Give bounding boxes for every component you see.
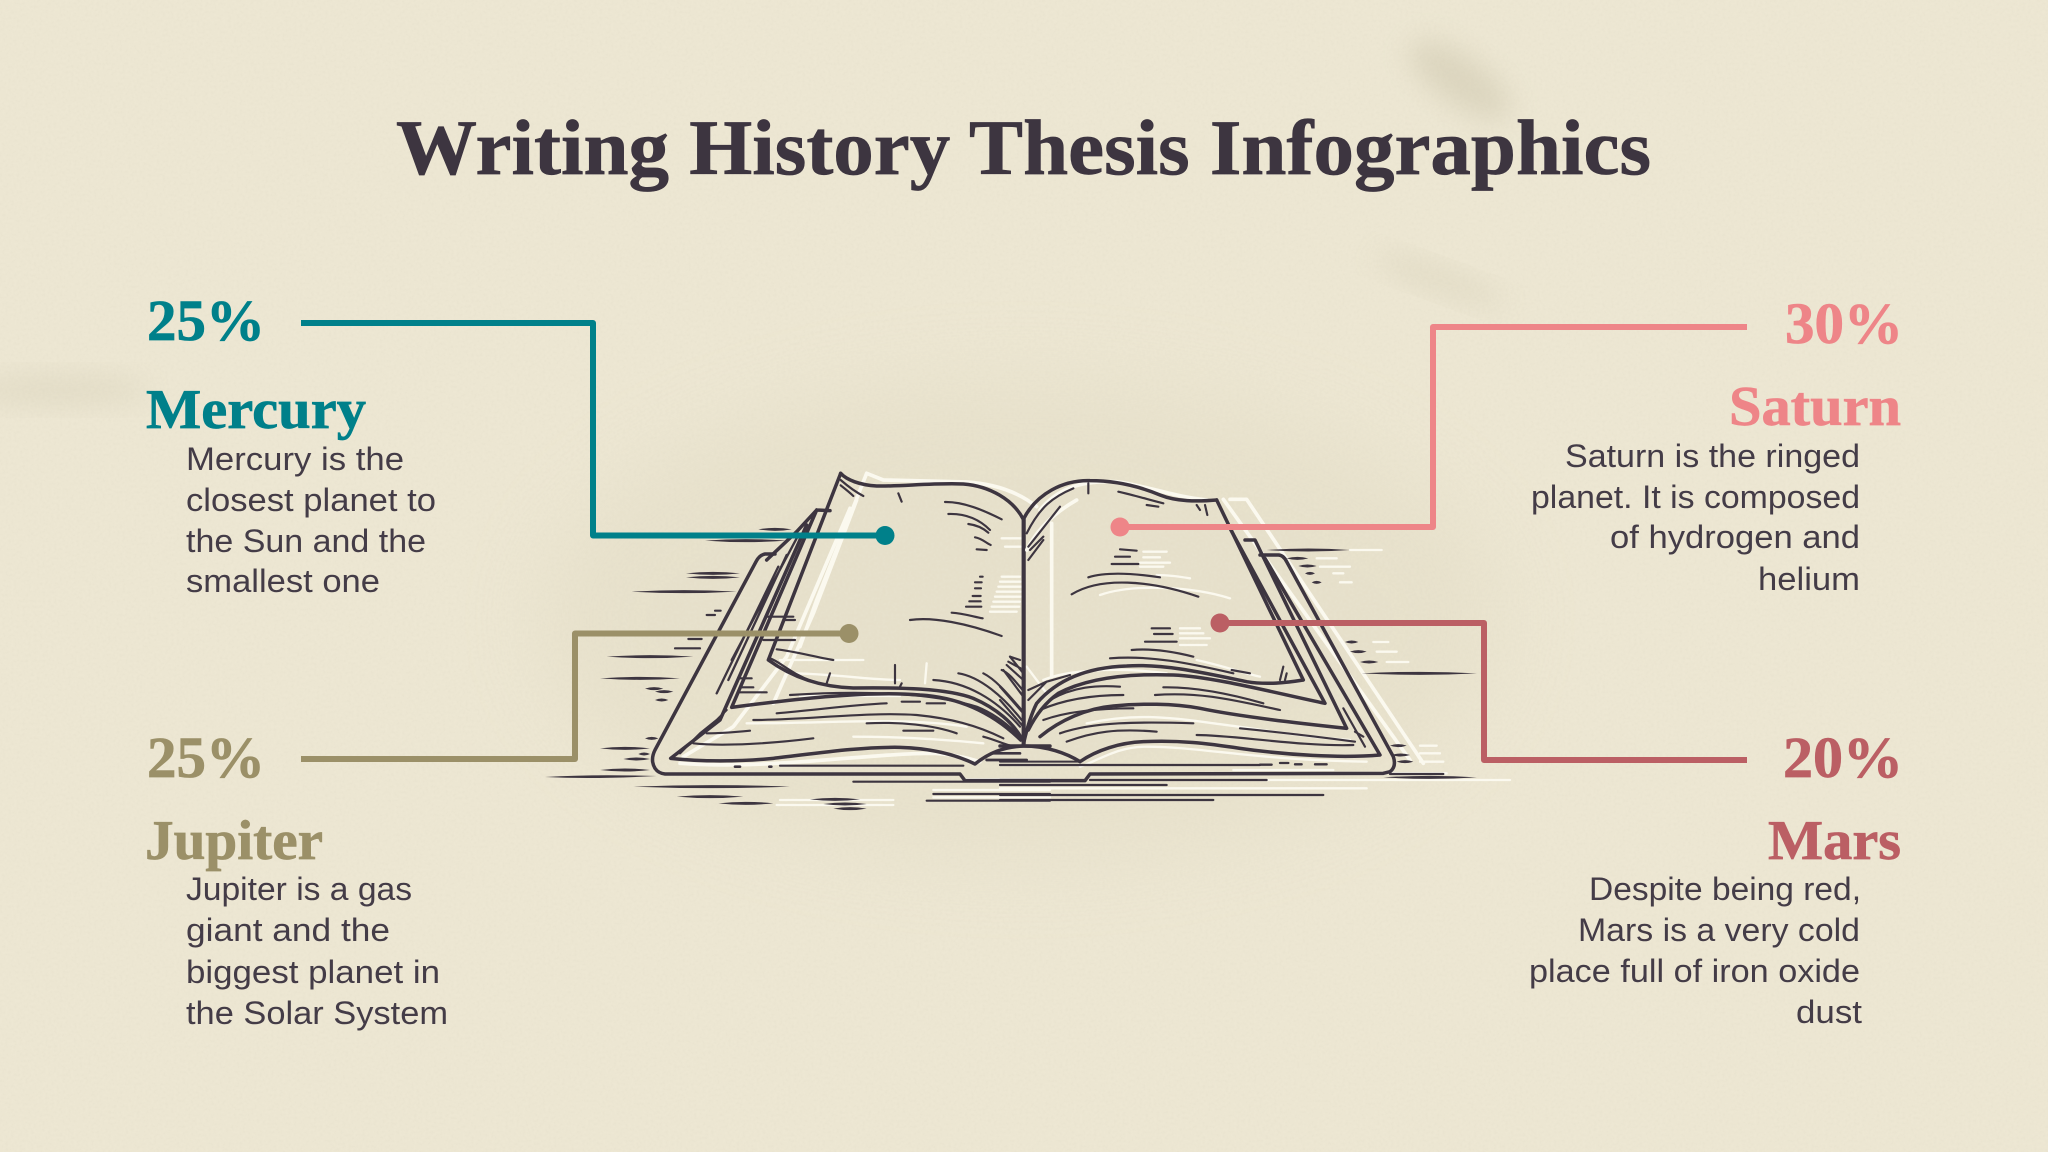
percentage: Mercury 25%: 25%: [147, 288, 265, 353]
description: Mars: dust: [1796, 994, 1862, 1030]
description: Jupiter: the Solar System: [186, 995, 448, 1031]
panel: Mars: [1210, 614, 1903, 1030]
connector: Mercury: [301, 323, 894, 545]
description: Jupiter: giant and the: [186, 912, 390, 948]
panel: Jupiter: [145, 624, 858, 1031]
description: Mars: place full of iron oxide: [1529, 953, 1860, 989]
panel: Saturn: [1110, 291, 1903, 597]
percentage: Saturn 30%: 30%: [1785, 291, 1903, 356]
description: Mercury: Mercury is the: [186, 441, 404, 477]
connector: Mars: [1210, 614, 1747, 760]
description: Jupiter: biggest planet in: [186, 954, 440, 990]
icon: open book illustration: [545, 473, 1510, 810]
description: Jupiter: [186, 871, 448, 1031]
title: Writing History Thesis Infographics: [396, 104, 1651, 191]
right half of book: [1000, 481, 1510, 800]
description: Mars: [1529, 871, 1862, 1030]
description: Mercury: smallest one: [186, 563, 380, 599]
description: Mercury: the Sun and the: [186, 523, 426, 559]
description: Saturn: helium: [1758, 561, 1860, 597]
description: Saturn: [1531, 438, 1860, 597]
percentage: Jupiter 25%: 25%: [147, 725, 265, 790]
panel: Mercury: [146, 288, 894, 599]
heading: Jupiter: Jupiter: [145, 810, 323, 872]
left half of book: [545, 473, 1050, 810]
description: Saturn: planet. It is composed: [1531, 479, 1860, 515]
description: Mars: Despite being red,: [1589, 871, 1861, 907]
speed lines: right: [1267, 548, 1477, 779]
percentage: Mars 20%: 20%: [1783, 725, 1903, 790]
description: Jupiter: Jupiter is a gas: [186, 871, 412, 907]
speed lines: left: [545, 528, 867, 810]
heading: Mars: Mars: [1768, 810, 1901, 872]
connector: Jupiter: [301, 624, 858, 759]
heading: Saturn: Saturn: [1729, 376, 1901, 438]
connector: Saturn: [1110, 327, 1747, 536]
description: Saturn: of hydrogen and: [1610, 519, 1860, 555]
description: Mercury: closest planet to: [186, 482, 436, 518]
description: Saturn: Saturn is the ringed: [1565, 438, 1860, 474]
description: Mercury: [186, 441, 436, 599]
description: Mars: Mars is a very cold: [1578, 912, 1860, 948]
heading: Mercury: Mercury: [146, 379, 366, 441]
